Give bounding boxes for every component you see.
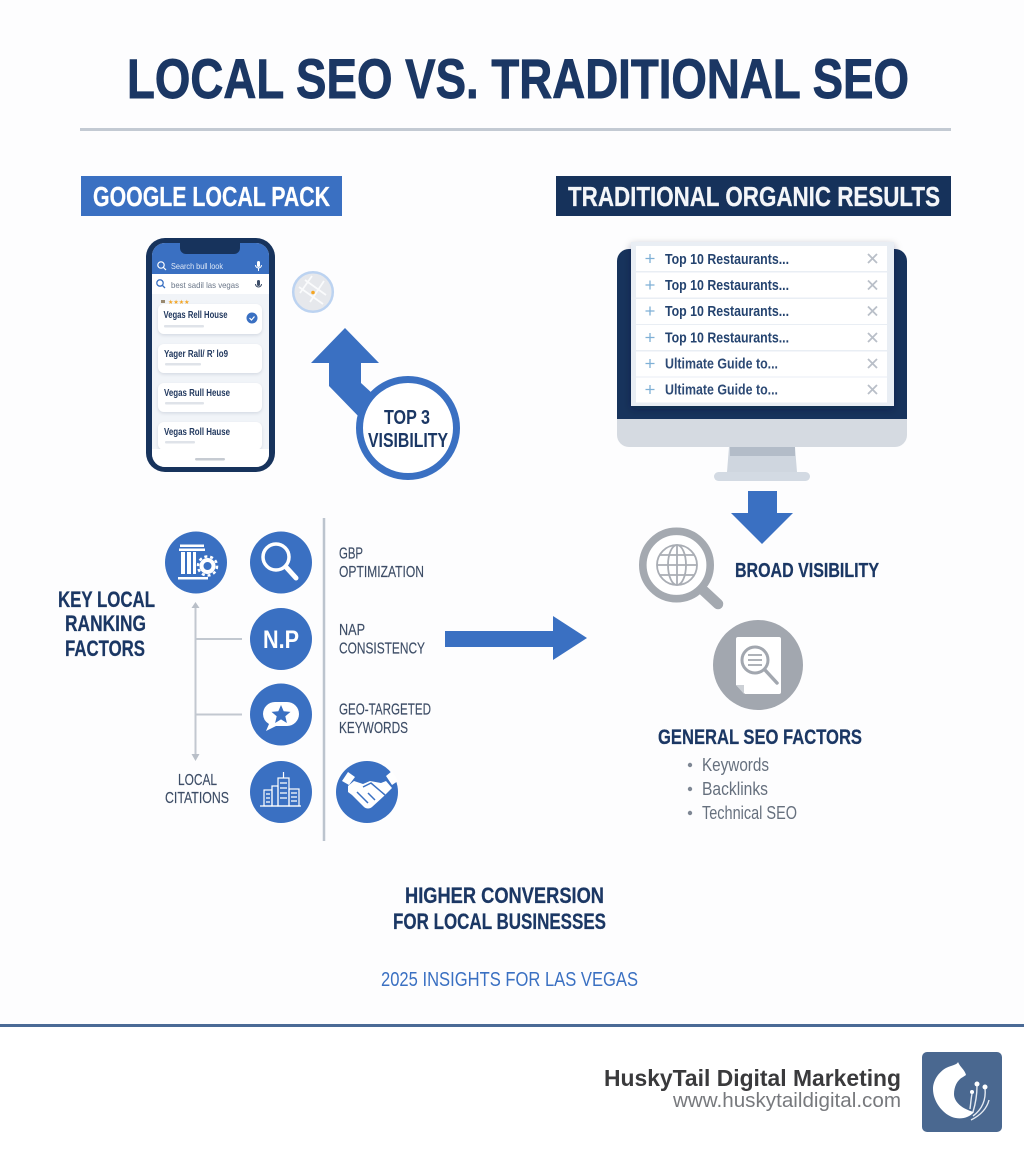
heading: key local ranking factors xyxy=(58,587,155,661)
result row 2: Top 10 Restaurants... xyxy=(665,277,789,294)
result row 6 xyxy=(636,378,887,402)
result row 3: Top 10 Restaurants... xyxy=(665,303,789,320)
footer brand name: HuskyTail Digital Marketing xyxy=(604,1065,901,1091)
label: local citations: CITATIONS xyxy=(165,790,229,807)
list: general seo factors: Technical SEO xyxy=(702,803,797,823)
callout: top 3 visibility: TOP 3 xyxy=(384,407,430,429)
icon: nap letters: N.P xyxy=(263,626,299,654)
result row 2 xyxy=(636,272,887,298)
label: geo-targeted keywords xyxy=(339,702,431,737)
callout: top 3 visibility xyxy=(360,380,456,476)
icon: smartphone with local pack xyxy=(146,238,275,472)
icon: city buildings xyxy=(250,761,312,823)
subtitle: 2025 insights: 2025 INSIGHTS FOR LAS VEGAS xyxy=(381,969,638,991)
conclusion text: HIGHER CONVERSION xyxy=(405,883,604,908)
result card 4: Vegas Roll Hause xyxy=(164,427,230,438)
label: broad visibility: BROAD VISIBILITY xyxy=(735,560,880,582)
result row 5: Ultimate Guide to... xyxy=(665,356,778,372)
heading: traditional organic results xyxy=(556,176,951,216)
list: general seo factors xyxy=(688,755,797,823)
arrow: up to map xyxy=(311,328,385,420)
label: geo-targeted keywords: GEO-TARGETED xyxy=(339,702,431,718)
icon: building and gear xyxy=(165,532,227,594)
label: gbp optimization xyxy=(339,546,424,581)
result row 1: Top 10 Restaurants... xyxy=(665,251,789,268)
icon: review speech bubble xyxy=(250,684,312,746)
icon: magnifying glass xyxy=(250,532,312,594)
result row 4: Top 10 Restaurants... xyxy=(665,330,789,346)
icon: smartphone with local pack: best sadil las vegas xyxy=(171,280,239,290)
result row 3 xyxy=(636,299,887,324)
list: general seo factors: Keywords xyxy=(702,755,769,775)
conclusion text: FOR LOCAL BUSINESSES xyxy=(393,909,606,934)
conclusion text xyxy=(393,883,606,934)
result card 2: Yager Rall/ R’ lo9 xyxy=(164,349,228,360)
label: gbp optimization: OPTIMIZATION xyxy=(339,564,424,581)
heading: key local ranking factors: RANKING xyxy=(65,611,146,636)
arrow: local to traditional xyxy=(445,616,587,660)
result row 1 xyxy=(636,246,887,271)
result card 3: Vegas Rull Heuse xyxy=(164,388,230,399)
heading: key local ranking factors: FACTORS xyxy=(65,636,145,661)
callout: top 3 visibility: VISIBILITY xyxy=(368,430,449,452)
result row 4 xyxy=(636,325,887,350)
heading: google local pack: GOOGLE LOCAL PACK xyxy=(93,181,330,212)
result card 4 xyxy=(158,422,262,450)
icon: magnifier with globe xyxy=(643,531,718,604)
label: nap consistency: NAP xyxy=(339,622,365,639)
label: local citations: LOCAL xyxy=(178,772,217,789)
label: gbp optimization: GBP xyxy=(339,546,363,562)
arrow: down to broad visibility xyxy=(731,491,793,544)
connector arrow: factors xyxy=(192,602,242,761)
icon: desktop monitor with organic results xyxy=(617,242,907,481)
icon: nap letters xyxy=(250,608,312,670)
icon: map pin circle xyxy=(293,272,333,312)
result card 1 xyxy=(158,304,262,334)
footer logo xyxy=(922,1052,1002,1132)
list: general seo factors: Backlinks xyxy=(702,779,768,799)
icon: document search circle xyxy=(713,620,803,710)
result row 5 xyxy=(636,352,887,376)
result row 6: Ultimate Guide to... xyxy=(665,382,778,398)
footer url: www.huskytaildigital.com xyxy=(672,1090,901,1112)
heading: key local ranking factors: KEY LOCAL xyxy=(58,587,155,612)
icon: handshake xyxy=(336,761,398,823)
icon: smartphone with local pack: ★★★★ xyxy=(168,299,190,306)
result card 1: Vegas Rell House xyxy=(164,310,228,321)
result card 2 xyxy=(158,344,262,373)
heading: general seo factors: GENERAL SEO FACTORS xyxy=(658,726,862,749)
label: nap consistency: CONSISTENCY xyxy=(339,640,425,658)
label: local citations xyxy=(165,772,229,807)
footer xyxy=(0,1024,1024,1154)
label: nap consistency xyxy=(339,622,425,658)
label: geo-targeted keywords: KEYWORDS xyxy=(339,720,408,737)
icon: smartphone with local pack: Search bull look xyxy=(171,261,224,271)
result card 3 xyxy=(158,383,262,412)
heading: traditional organic results: TRADITIONAL ORGANIC RESULTS xyxy=(568,181,940,212)
heading: google local pack xyxy=(81,176,342,216)
